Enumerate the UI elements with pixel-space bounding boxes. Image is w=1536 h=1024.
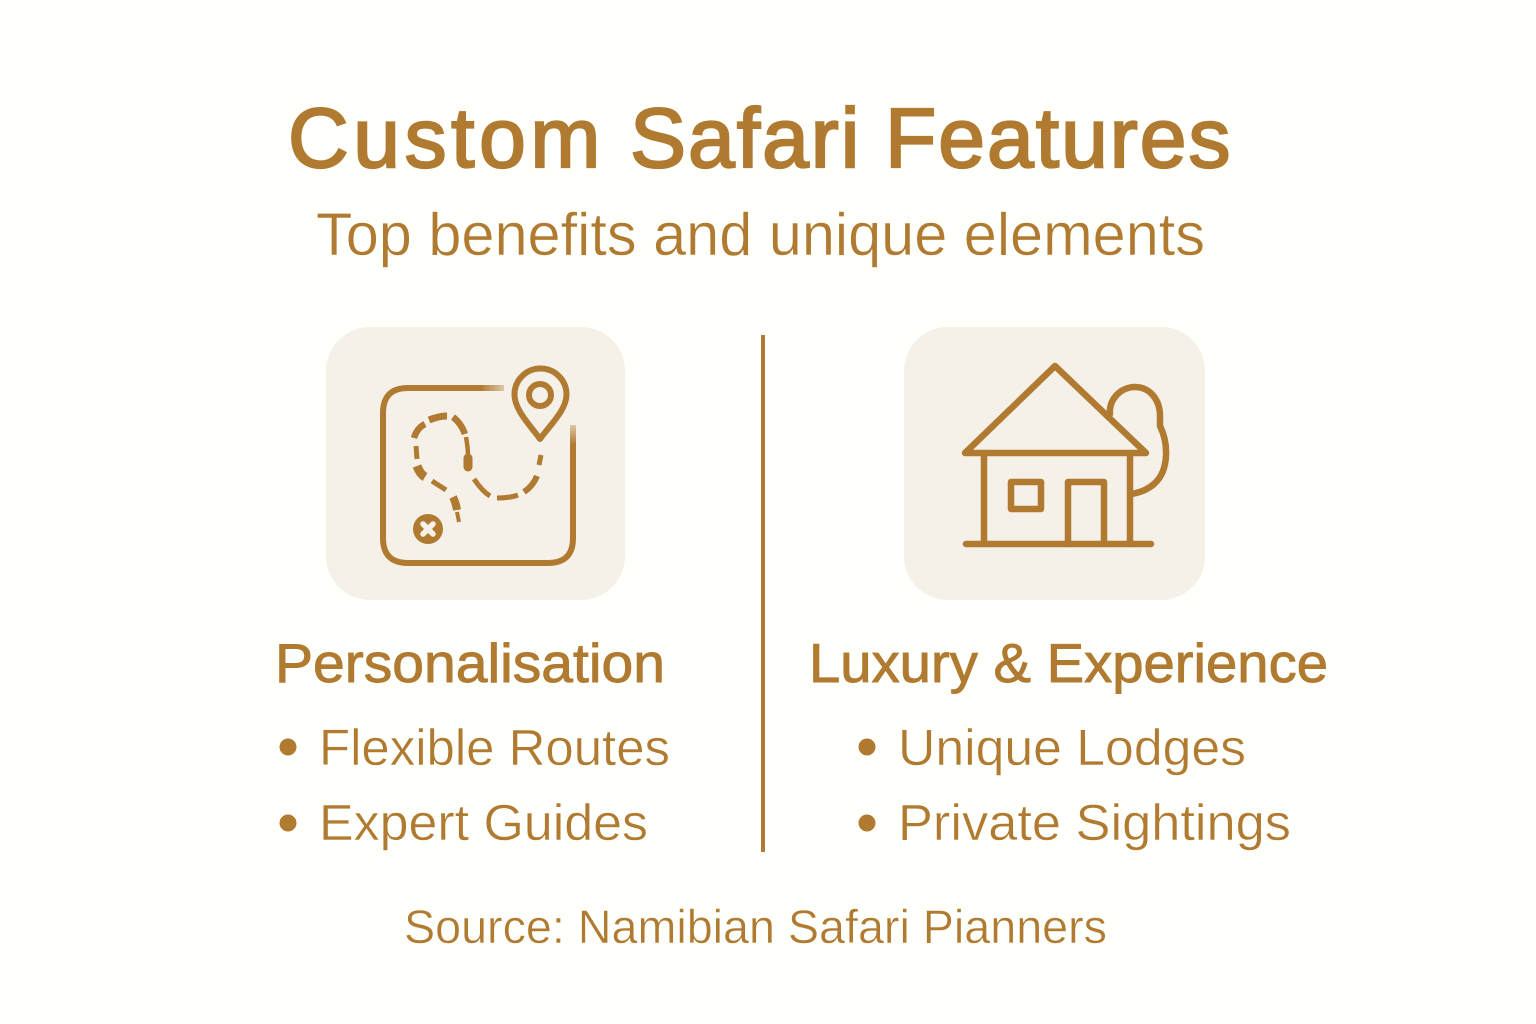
map frame fade right [570, 425, 576, 446]
bullet: private sightings: Private Sightings [898, 794, 1291, 851]
centre divider [761, 335, 765, 852]
heading: luxury and experience: Luxury & Experience [809, 632, 1328, 694]
map pin [514, 369, 566, 439]
title: Features [885, 91, 1232, 185]
icon tile: luxury [904, 327, 1205, 600]
tree [1110, 387, 1166, 494]
dashed route [414, 416, 541, 522]
map frame [383, 388, 573, 563]
door [1068, 482, 1104, 544]
icon: lodge with tree [965, 366, 1166, 544]
bullet: flexible routes: Flexible Routes [319, 719, 670, 776]
panel: luxury and experience [809, 327, 1328, 851]
window [1011, 482, 1041, 509]
heading: personalisation: Personalisation [275, 632, 665, 694]
source note: Source: Namibian Safari Pianners [404, 900, 1107, 953]
panel: personalisation [275, 327, 670, 851]
subtitle: Top benefits and unique elements [316, 201, 1205, 268]
icon tile: personalisation [326, 327, 625, 600]
bullet: unique lodges: Unique Lodges [898, 719, 1246, 776]
walls [984, 453, 1130, 544]
map pin centre [529, 384, 551, 406]
icon: map with route and pin [383, 369, 573, 563]
roof [965, 366, 1146, 453]
title: Custom [288, 91, 605, 185]
bullet: expert guides: Expert Guides [319, 794, 648, 851]
map frame fade top [480, 385, 504, 391]
destination marker [413, 514, 443, 544]
title: Safari [630, 91, 861, 185]
ground [966, 541, 1151, 547]
